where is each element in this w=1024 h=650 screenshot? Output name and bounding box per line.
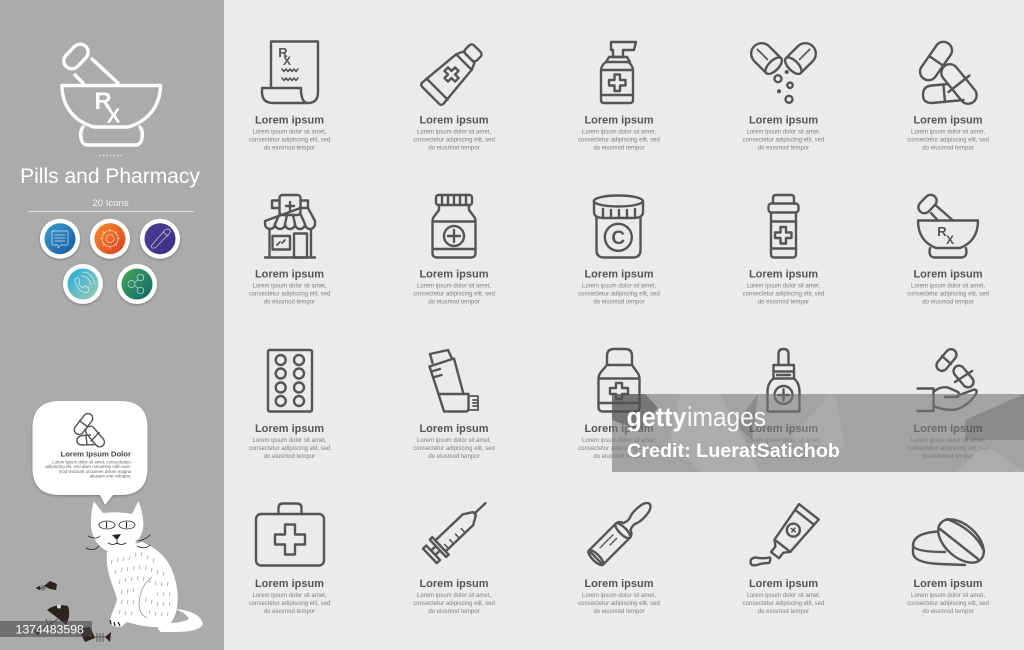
heading: Lorem ipsum bbox=[584, 423, 654, 435]
item: pump bottle bbox=[578, 42, 660, 152]
description bbox=[413, 593, 495, 615]
description bbox=[249, 593, 330, 615]
heading: Lorem ipsum bbox=[749, 114, 818, 126]
description: consectetur adipiscing elit, sed bbox=[743, 601, 824, 607]
item: open capsule bbox=[743, 39, 824, 152]
description: consectetur adipiscing elit, sed bbox=[413, 138, 495, 144]
item: pharmacy shop bbox=[249, 195, 330, 306]
item: pills bbox=[907, 39, 989, 152]
icon: squeezed ointment bbox=[751, 504, 819, 565]
watermark: Credit: LueratSatichob bbox=[627, 441, 840, 462]
description: consectetur adipiscing elit, sed bbox=[907, 292, 989, 298]
icon: mortar and pestle: X bbox=[946, 233, 954, 247]
icon: ointment tin bbox=[913, 511, 992, 571]
icon: medicine bottle bbox=[598, 349, 640, 412]
icon: mortar and pestle: R bbox=[937, 224, 947, 239]
item: ointment tin bbox=[907, 511, 992, 615]
item: squeezed ointment bbox=[743, 504, 824, 615]
icon: open capsule bbox=[747, 39, 820, 103]
description: do eiusmod tempor bbox=[922, 300, 974, 306]
description: do eiusmod tempor bbox=[922, 454, 974, 460]
heading: Lorem ipsum bbox=[255, 578, 324, 590]
icon: prescription: R bbox=[278, 45, 288, 60]
icon: pump bottle bbox=[601, 42, 636, 103]
description: Lorem ipsum dolor sit amet, bbox=[417, 438, 491, 444]
description bbox=[907, 130, 989, 152]
description: consectetur adipiscing elit, sed bbox=[907, 138, 989, 144]
description: consectetur adipiscing elit, sed bbox=[578, 292, 660, 298]
icon: inhaler bbox=[430, 350, 478, 412]
heading: Lorem ipsum bbox=[255, 114, 324, 126]
description bbox=[249, 438, 330, 460]
icon: prescription: X bbox=[283, 54, 291, 68]
item: blister pack bbox=[249, 350, 330, 460]
description bbox=[743, 438, 824, 460]
description bbox=[578, 438, 660, 460]
item: tube bbox=[413, 38, 495, 152]
description: do eiusmod tempor bbox=[758, 146, 809, 152]
button: share bbox=[117, 264, 157, 304]
item: mortar and pestle bbox=[907, 192, 989, 306]
description: consectetur adipiscing elit, sed bbox=[413, 601, 495, 607]
icon: prescription bbox=[262, 42, 318, 103]
heading: Lorem ipsum bbox=[584, 268, 654, 280]
description bbox=[578, 593, 660, 615]
description: Lorem ipsum dolor sit amet, bbox=[582, 130, 656, 136]
description bbox=[413, 284, 495, 306]
subtitle: 20 Icons bbox=[92, 198, 129, 209]
description bbox=[578, 130, 660, 152]
item: syringe bbox=[413, 495, 495, 615]
icon: ampoule bbox=[586, 497, 657, 567]
heading: Lorem ipsum bbox=[419, 114, 489, 126]
description: Lorem ipsum dolor sit amet, bbox=[252, 438, 327, 444]
illustration: fish bones bbox=[34, 581, 111, 642]
heading: Lorem ipsum bbox=[255, 268, 324, 280]
icon: pills bbox=[917, 39, 980, 107]
illustration: cat bbox=[34, 501, 203, 642]
watermark bbox=[612, 394, 1024, 472]
icon: pills in bubble bbox=[72, 412, 106, 449]
icon: medicine jar bbox=[432, 195, 476, 258]
icon: mortar and pestle bbox=[916, 192, 978, 258]
description: Lorem ipsum dolor sit amet, bbox=[252, 130, 327, 136]
description: do eiusmod tempor bbox=[593, 609, 645, 615]
icon: first aid kit bbox=[256, 504, 324, 566]
description: do eiusmod tempor bbox=[428, 146, 480, 152]
panel: sidebar bbox=[0, 0, 224, 650]
heading: Lorem ipsum bbox=[749, 423, 818, 435]
heading: Lorem ipsum bbox=[419, 268, 489, 280]
description: consectetur adipiscing elit, sed bbox=[249, 446, 330, 452]
bubble text: aliquam erat volutpat. bbox=[90, 474, 131, 479]
icon: large mortar and pestle: X bbox=[107, 106, 121, 128]
description: consectetur adipiscing elit, sed bbox=[578, 446, 660, 452]
description: consectetur adipiscing elit, sed bbox=[743, 138, 824, 144]
description: Lorem ipsum dolor sit amet, bbox=[582, 438, 656, 444]
description: do eiusmod tempor bbox=[593, 454, 645, 460]
heading: Lorem ipsum bbox=[749, 268, 818, 280]
description: do eiusmod tempor bbox=[922, 146, 974, 152]
button: chat bbox=[40, 219, 80, 259]
description: Lorem ipsum dolor sit amet, bbox=[417, 593, 491, 599]
description: do eiusmod tempor bbox=[428, 609, 480, 615]
icon: syringe bbox=[422, 495, 494, 565]
description: Lorem ipsum dolor sit amet, bbox=[746, 284, 821, 290]
description: Lorem ipsum dolor sit amet, bbox=[417, 284, 491, 290]
description bbox=[743, 284, 824, 306]
dots divider bbox=[100, 154, 122, 156]
icon: blister pack bbox=[268, 350, 312, 412]
watermark: getty bbox=[626, 402, 686, 432]
title: Pills and Pharmacy bbox=[20, 165, 200, 188]
description: do eiusmod tempor bbox=[428, 300, 480, 306]
heading: Lorem ipsum bbox=[584, 578, 654, 590]
description: do eiusmod tempor bbox=[922, 609, 974, 615]
button: settings bbox=[90, 219, 130, 259]
description: do eiusmod tempor bbox=[593, 146, 645, 152]
description: consectetur adipiscing elit, sed bbox=[907, 601, 989, 607]
description: Lorem ipsum dolor sit amet, bbox=[911, 284, 985, 290]
description bbox=[743, 130, 824, 152]
description: Lorem ipsum dolor sit amet, bbox=[746, 130, 821, 136]
description: do eiusmod tempor bbox=[758, 454, 809, 460]
watermark: images bbox=[687, 402, 766, 432]
bubble text: mod tincidunt ut laoreet dolore magna bbox=[59, 469, 132, 474]
description: Lorem ipsum dolor sit amet, bbox=[252, 284, 327, 290]
description: consectetur adipiscing elit, sed bbox=[743, 292, 824, 298]
description: Lorem ipsum dolor sit amet, bbox=[252, 593, 327, 599]
description bbox=[907, 284, 989, 306]
icon: tube bbox=[420, 38, 488, 106]
description: do eiusmod tempor bbox=[758, 609, 809, 615]
item: ampoule bbox=[578, 497, 660, 615]
bubble heading: Lorem Ipsum Dolor bbox=[61, 450, 131, 458]
bubble text bbox=[45, 460, 132, 479]
description: do eiusmod tempor bbox=[428, 454, 480, 460]
description: consectetur adipiscing elit, sed bbox=[249, 138, 330, 144]
description bbox=[907, 438, 989, 460]
description: consectetur adipiscing elit, sed bbox=[907, 446, 989, 452]
item: cream jar bbox=[578, 196, 660, 306]
icon: dropper bottle bbox=[768, 349, 800, 412]
heading: Lorem ipsum bbox=[584, 114, 654, 126]
bubble text: adipiscing elit, sed diam nonummy nibh euis- bbox=[45, 464, 132, 469]
icon: pill bottle bbox=[768, 195, 798, 258]
description: do eiusmod tempor bbox=[758, 300, 809, 306]
icon: pharmacy shop bbox=[265, 195, 315, 258]
description: consectetur adipiscing elit, sed bbox=[249, 601, 330, 607]
description: Lorem ipsum dolor sit amet, bbox=[582, 593, 656, 599]
description: Lorem ipsum dolor sit amet, bbox=[911, 593, 985, 599]
description bbox=[907, 593, 989, 615]
heading: Lorem ipsum bbox=[913, 423, 983, 435]
icon: cream jar: C bbox=[611, 228, 625, 249]
description: consectetur adipiscing elit, sed bbox=[413, 292, 495, 298]
item: prescription bbox=[249, 42, 330, 152]
description: consectetur adipiscing elit, sed bbox=[249, 292, 330, 298]
heading: Lorem ipsum bbox=[913, 268, 983, 280]
description bbox=[249, 130, 330, 152]
item: first aid kit bbox=[249, 504, 330, 615]
description bbox=[413, 438, 495, 460]
description: Lorem ipsum dolor sit amet, bbox=[746, 438, 821, 444]
icon: pills over hand bbox=[918, 347, 977, 411]
button: phone bbox=[63, 264, 103, 304]
description: Lorem ipsum dolor sit amet, bbox=[582, 284, 656, 290]
description bbox=[578, 284, 660, 306]
item: pill bottle bbox=[743, 195, 824, 306]
icon: large mortar and pestle: R bbox=[94, 88, 112, 115]
description: Lorem ipsum dolor sit amet, bbox=[746, 593, 821, 599]
item: dropper bottle bbox=[743, 349, 824, 460]
item: medicine jar bbox=[413, 195, 495, 306]
icon: large mortar and pestle bbox=[61, 41, 160, 145]
callout: speech bubble bbox=[32, 401, 148, 505]
heading: Lorem ipsum bbox=[419, 578, 489, 590]
button: pen bbox=[140, 219, 180, 259]
bubble text: Lorem ipsum dolor sit amet, consectetuer bbox=[52, 460, 132, 464]
description: Lorem ipsum dolor sit amet, bbox=[417, 130, 491, 136]
description: do eiusmod tempor bbox=[264, 300, 315, 306]
description: Lorem ipsum dolor sit amet, bbox=[911, 438, 985, 444]
description: consectetur adipiscing elit, sed bbox=[413, 446, 495, 452]
description: do eiusmod tempor bbox=[264, 146, 315, 152]
description bbox=[413, 130, 495, 152]
heading: Lorem ipsum bbox=[749, 578, 818, 590]
description: consectetur adipiscing elit, sed bbox=[578, 601, 660, 607]
heading: Lorem ipsum bbox=[913, 114, 983, 126]
description: do eiusmod tempor bbox=[264, 609, 315, 615]
heading: Lorem ipsum bbox=[255, 423, 324, 435]
description: do eiusmod tempor bbox=[593, 300, 645, 306]
item: medicine bottle bbox=[578, 349, 660, 460]
description bbox=[743, 593, 824, 615]
description bbox=[249, 284, 330, 306]
heading: Lorem ipsum bbox=[419, 423, 489, 435]
image id tag bbox=[0, 621, 92, 637]
description: consectetur adipiscing elit, sed bbox=[743, 446, 824, 452]
description: consectetur adipiscing elit, sed bbox=[578, 138, 660, 144]
item: pills over hand bbox=[907, 347, 989, 460]
image id tag: 1374483598 bbox=[16, 622, 84, 636]
item: inhaler bbox=[413, 350, 495, 460]
description: do eiusmod tempor bbox=[264, 454, 315, 460]
description: Lorem ipsum dolor sit amet, bbox=[911, 130, 985, 136]
heading: Lorem ipsum bbox=[913, 578, 983, 590]
